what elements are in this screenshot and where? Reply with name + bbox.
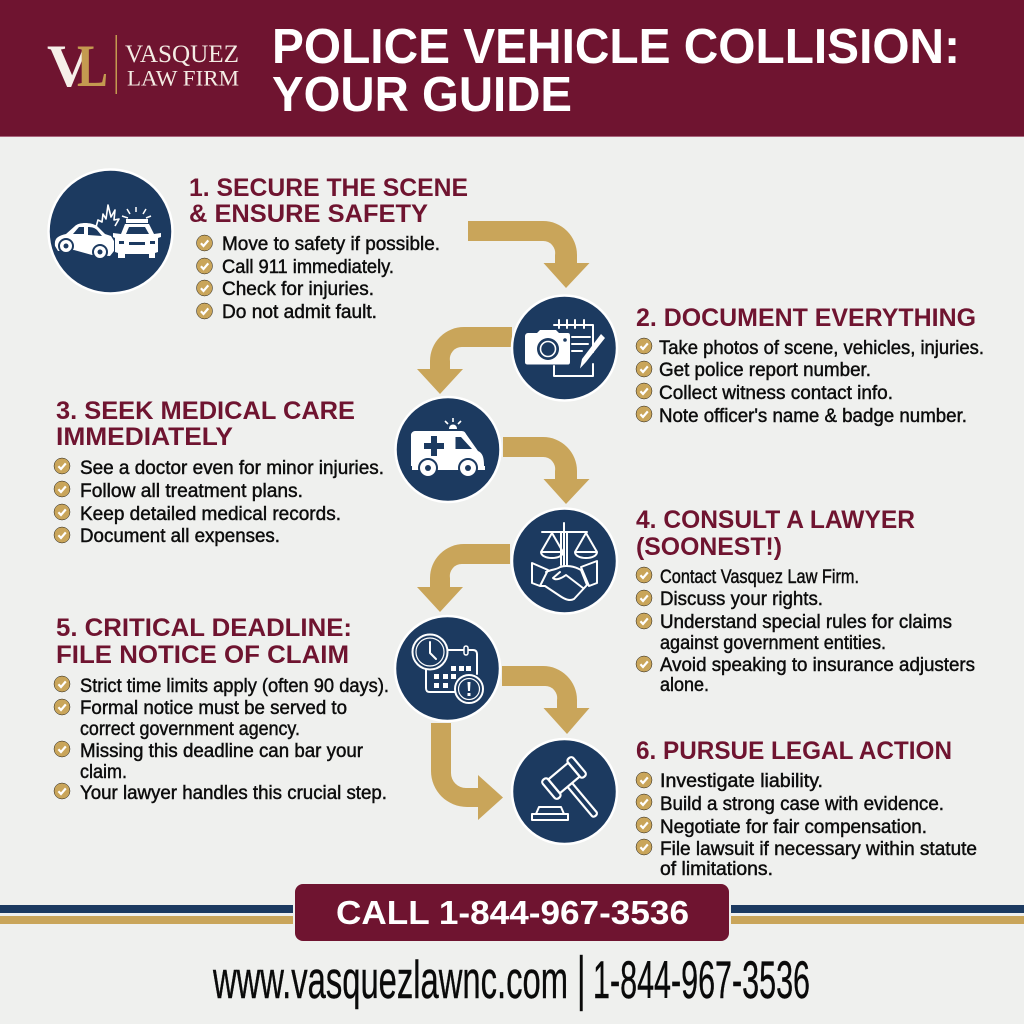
footer stripes	[0, 905, 1024, 924]
step 5 checklist: correct government agency.	[80, 719, 300, 740]
arrow: step 5 to 6 down	[431, 723, 503, 820]
step 6 checklist: Negotiate for fair compensation.	[660, 817, 927, 838]
arrow: step 1 to 2	[468, 221, 590, 288]
header banner	[0, 0, 1024, 137]
step 3 heading	[56, 397, 355, 451]
step 3 heading: 3. SEEK MEDICAL CARE	[56, 397, 355, 425]
step 2 checklist: Get police report number.	[659, 360, 871, 381]
arrow: step 2 to 3	[417, 327, 512, 394]
step 2 checklist: Take photos of scene, vehicles, injuries.	[659, 338, 984, 359]
step 6 checklist: Build a strong case with evidence.	[660, 794, 944, 815]
icon: camera and notepad	[512, 296, 617, 400]
step 4 checklist: Understand special rules for claims	[660, 612, 952, 633]
logo: Vasquez Law Firm	[47, 33, 239, 99]
call to action button: CALL 1-844-967-3536	[336, 894, 689, 931]
step 3 checklist: Keep detailed medical records.	[80, 504, 341, 525]
step 2 checklist	[636, 338, 984, 427]
step 4 checklist	[636, 567, 975, 696]
title: POLICE VEHICLE COLLISION:	[272, 20, 960, 74]
step 4 checklist: Avoid speaking to insurance adjusters	[660, 655, 975, 676]
step 3 checklist: Follow all treatment plans.	[80, 481, 303, 502]
step 1 checklist: Move to safety if possible.	[222, 234, 440, 255]
step 1 heading	[189, 174, 468, 228]
logo: Vasquez Law Firm: LAW FIRM	[127, 66, 239, 90]
step 6 checklist: of limitations.	[660, 859, 773, 880]
step 5 checklist: claim.	[80, 762, 127, 783]
icon: collision with police car	[48, 170, 172, 294]
step 4 checklist: alone.	[660, 675, 709, 696]
step 6 checklist: File lawsuit if necessary within statute	[660, 839, 977, 860]
step 4 heading	[636, 506, 915, 561]
step 2 heading: 2. DOCUMENT EVERYTHING	[636, 304, 976, 332]
step 5 checklist	[54, 676, 389, 804]
step 4 heading: 4. CONSULT A LAWYER	[636, 506, 915, 534]
step 5 checklist: Missing this deadline can bar your	[80, 741, 364, 762]
website and phone: 1-844-967-3536	[593, 951, 810, 1010]
arrow: step 5 to 6 right	[502, 666, 590, 734]
step 3 heading: IMMEDIATELY	[56, 423, 233, 451]
step 2 checklist: Collect witness contact info.	[659, 383, 893, 404]
step 6 heading: 6. PURSUE LEGAL ACTION	[636, 737, 952, 765]
step 1 checklist: Check for injuries.	[222, 279, 374, 300]
step 1 checklist: Call 911 immediately.	[222, 257, 394, 278]
logo: Vasquez Law Firm: L	[77, 33, 108, 99]
step 2 checklist: Note officer's name & badge number.	[659, 406, 967, 427]
step 1 checklist: Do not admit fault.	[222, 302, 377, 323]
step 1 heading: 1. SECURE THE SCENE	[189, 174, 468, 202]
step 3 checklist	[54, 458, 384, 547]
icon: gavel	[512, 739, 617, 844]
icon: ambulance	[396, 397, 500, 502]
title	[272, 20, 960, 122]
step 4 checklist: Discuss your rights.	[660, 589, 823, 610]
step 1 checklist	[196, 234, 440, 323]
arrow: step 4 to 5	[417, 544, 510, 612]
step 5 checklist: Strict time limits apply (often 90 days).	[80, 676, 389, 697]
step 5 heading	[56, 614, 352, 669]
logo: Vasquez Law Firm: V	[47, 33, 91, 99]
step 5 heading: FILE NOTICE OF CLAIM	[56, 641, 349, 669]
icon: clock and calendar	[395, 616, 500, 721]
step 5 checklist: Formal notice must be served to	[80, 698, 347, 719]
step 3 checklist: Document all expenses.	[80, 526, 280, 547]
step 5 heading: 5. CRITICAL DEADLINE:	[56, 614, 352, 642]
website and phone: www.vasquezlawnc.com	[212, 951, 568, 1010]
step 6 checklist	[636, 771, 977, 880]
step 4 heading: (SOONEST!)	[636, 533, 782, 561]
title: YOUR GUIDE	[272, 68, 572, 122]
step 6 checklist: Investigate liability.	[660, 771, 823, 792]
logo: Vasquez Law Firm: VASQUEZ	[125, 41, 239, 68]
step 4 checklist: Contact Vasquez Law Firm.	[660, 567, 859, 588]
step 4 checklist: against government entities.	[660, 633, 886, 654]
call to action button	[295, 884, 729, 941]
step 5 checklist: Your lawyer handles this crucial step.	[80, 783, 387, 804]
step 1 heading: & ENSURE SAFETY	[189, 200, 428, 228]
icon: scales and handshake	[512, 508, 617, 614]
arrow: step 3 to 4	[503, 437, 590, 504]
step 3 checklist: See a doctor even for minor injuries.	[80, 458, 384, 479]
